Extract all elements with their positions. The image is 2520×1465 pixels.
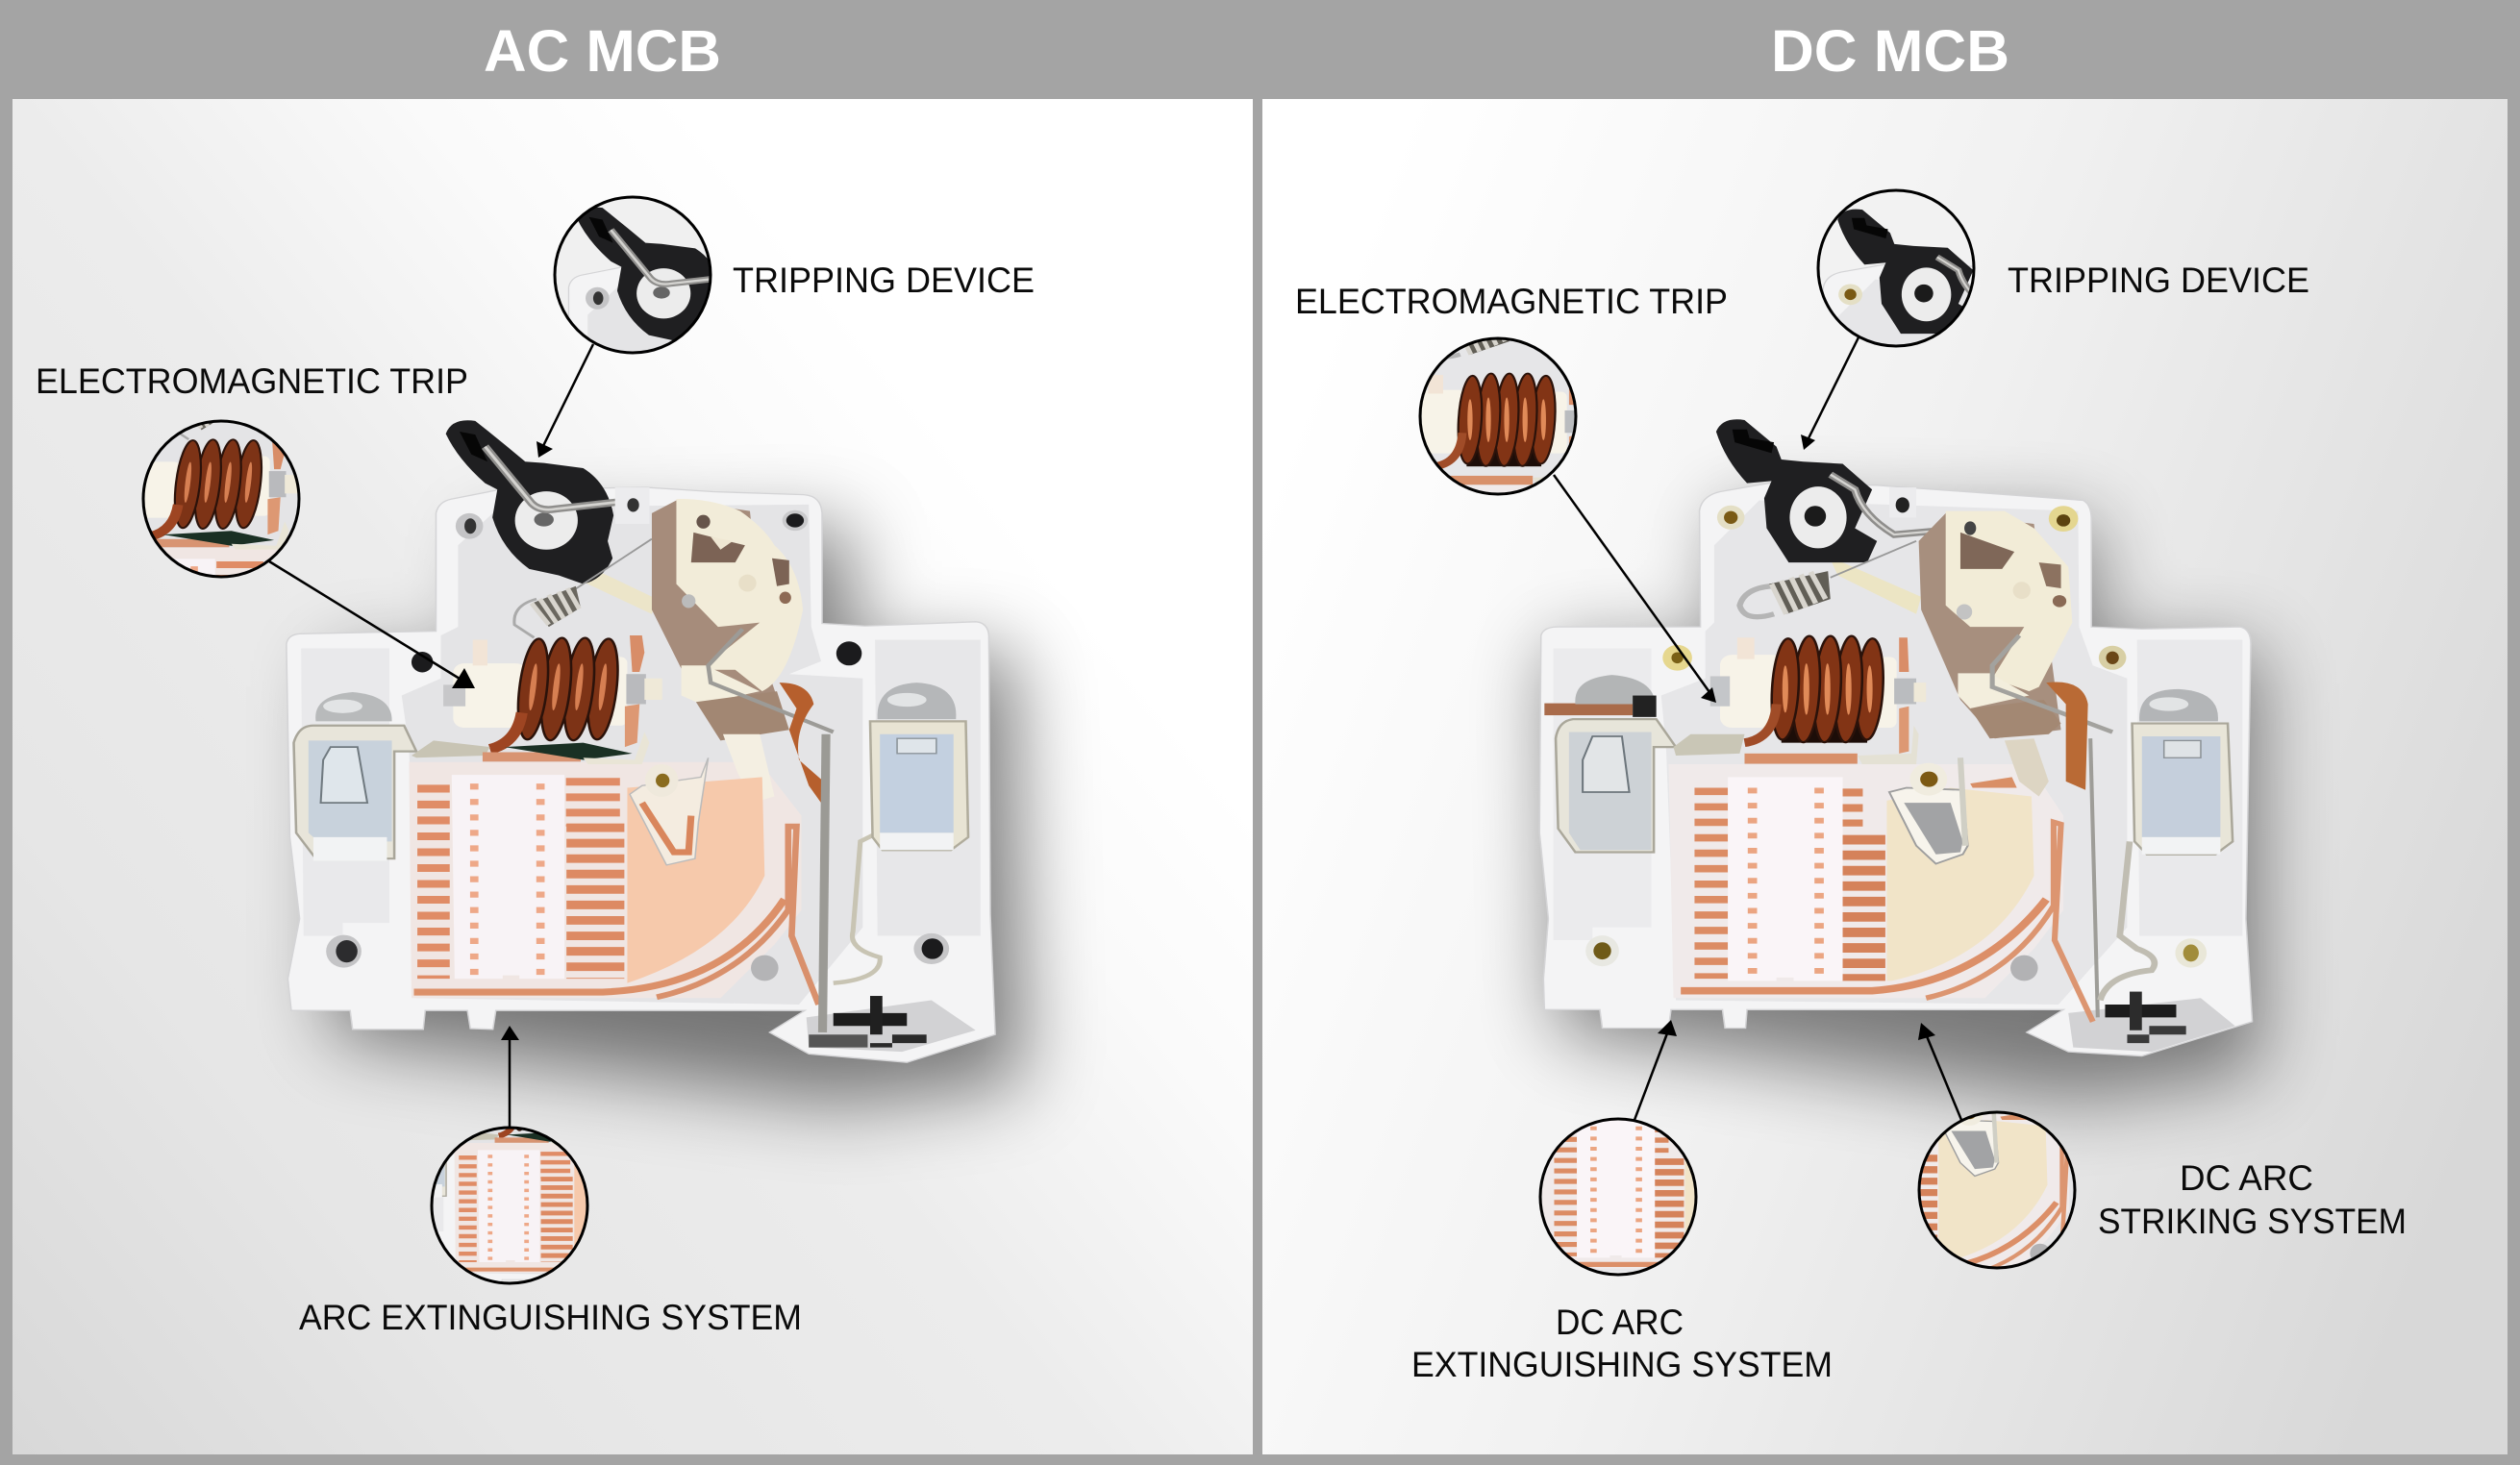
housing — [287, 487, 995, 1062]
shadow: AC breaker — [331, 527, 1023, 1104]
detail circle: DC arc extinguishing system — [1538, 1117, 1698, 1277]
trip wire — [485, 447, 630, 509]
copper fins — [402, 784, 465, 979]
spring — [514, 599, 536, 637]
clip mount — [2105, 1005, 2176, 1017]
label: AC arc extinguishing system: ARC EXTINGUISHING SYSTEM — [299, 1298, 802, 1337]
left terminal — [315, 692, 392, 721]
steel strip — [823, 734, 826, 1032]
panel: DC MCB background — [1262, 99, 2508, 1454]
label: AC electromagnetic trip: ELECTROMAGNETIC TRIP — [36, 361, 468, 401]
cream link — [584, 573, 657, 614]
coil bobbin — [1720, 655, 1784, 728]
label: DC arc striking system: DC ARC — [2180, 1158, 2313, 1198]
striking slug — [1889, 788, 1968, 864]
label: DC arc extinguishing system — [1411, 1303, 1833, 1384]
callout arrow: DC arc extinguishing system — [1634, 1020, 1677, 1120]
arc chamber plate — [627, 777, 764, 983]
mechanism plate — [1919, 513, 2061, 738]
AC MCB breaker illustration — [287, 420, 995, 1062]
clip mount — [834, 1013, 907, 1026]
brass screws — [1585, 506, 2207, 981]
arc striking plate — [1886, 788, 2034, 981]
callout arrow: DC electromagnetic trip — [1554, 475, 1716, 703]
label: DC electromagnetic trip: ELECTROMAGNETIC TRIP — [1295, 282, 1728, 321]
callout arrow: DC arc striking system — [1918, 1023, 1961, 1120]
copper rails — [1681, 900, 2046, 991]
mechanism plate — [652, 500, 786, 736]
callout arrow: DC tripping device — [1801, 335, 1859, 450]
right terminal — [878, 683, 956, 719]
trip wire — [1831, 475, 1968, 534]
shadow: DC breaker — [1548, 513, 2259, 1100]
panel: AC MCB background — [12, 99, 1253, 1454]
callout arrow: AC tripping device — [536, 344, 593, 458]
screw holes — [326, 510, 949, 981]
DC MCB breaker illustration — [1539, 419, 2253, 1056]
label: AC tripping device: TRIPPING DEVICE — [733, 261, 1035, 300]
label: DC arc striking system: STRIKING SYSTEM — [2098, 1202, 2407, 1241]
copper coil — [1782, 721, 1867, 743]
coil bobbin — [453, 663, 527, 728]
copper rails — [414, 900, 785, 992]
label: DC arc extinguishing system: DC ARC — [1556, 1303, 1684, 1342]
braid — [780, 683, 824, 803]
detail circle: AC arc extinguishing system — [431, 1127, 588, 1284]
left terminal — [1544, 704, 1633, 715]
label: DC arc extinguishing system: EXTINGUISHING SYSTEM — [1411, 1345, 1833, 1384]
detail circle: DC tripping device — [1817, 188, 1975, 348]
braid — [2046, 683, 2088, 790]
heading: AC MCB: AC MCB — [484, 18, 721, 84]
callout arrow: AC electromagnetic trip — [269, 561, 475, 688]
label: DC arc striking system — [2098, 1158, 2407, 1241]
white comb plate — [1728, 777, 1843, 981]
right terminal — [2139, 689, 2218, 721]
detail circle: AC tripping device — [554, 196, 711, 354]
copper fins — [1679, 788, 1744, 979]
label: DC tripping device: TRIPPING DEVICE — [2008, 261, 2309, 300]
white comb plate — [452, 775, 564, 979]
cream link — [1828, 554, 1921, 614]
heading: DC MCB: DC MCB — [1771, 18, 2009, 84]
detail circle: AC electromagnetic trip — [142, 419, 300, 579]
handle — [1716, 419, 1877, 562]
slot with copper — [630, 757, 709, 865]
handle — [446, 420, 613, 584]
callout arrow: AC arc extinguishing system — [501, 1026, 519, 1130]
housing — [1539, 484, 2253, 1056]
steel strip — [2090, 738, 2098, 1017]
copper coil — [513, 636, 622, 741]
spring — [1739, 586, 1774, 617]
detail circle: DC electromagnetic trip — [1419, 336, 1577, 496]
detail circle: DC arc striking system — [1917, 1111, 2077, 1269]
